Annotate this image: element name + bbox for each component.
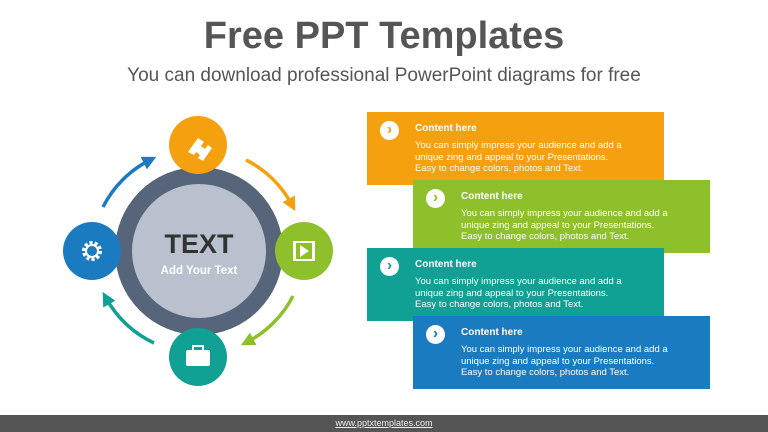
panel: blue: Content here [461, 327, 523, 338]
panel: green: You can simply impress your audience and add a [461, 208, 668, 219]
panel: orange: unique zing and appeal to your Presentations. [415, 152, 608, 162]
panel: teal: › [387, 257, 392, 274]
center circle: TEXT [164, 229, 234, 259]
footer: www.pptxtemplates.com [335, 418, 433, 428]
panel: teal: unique zing and appeal to your Presentations. [415, 288, 608, 298]
panel: green: Content here [461, 191, 523, 202]
panel: green: Easy to change colors, photos and Text. [461, 231, 629, 242]
icon: gear [63, 222, 121, 280]
panel: green: › [433, 189, 438, 206]
center circle [115, 167, 283, 335]
icon: briefcase [169, 328, 227, 386]
panel: teal: Easy to change colors, photos and Text. [415, 299, 583, 310]
panel: orange: Content here [415, 123, 477, 134]
panel: orange: You can simply impress your audience and add a [415, 140, 622, 151]
panel: teal [367, 248, 664, 321]
panel: green: unique zing and appeal to your Presentations. [461, 220, 654, 230]
footer [0, 415, 768, 432]
panel: teal: Content here [415, 259, 477, 270]
panel: blue: › [433, 325, 438, 342]
arrows [103, 160, 293, 343]
icon: puzzle [169, 116, 227, 174]
title: Free PPT Templates [204, 15, 564, 57]
panel: orange [367, 112, 664, 185]
subtitle: You can download professional PowerPoint diagrams for free [127, 65, 641, 86]
panel: teal: You can simply impress your audience and add a [415, 276, 622, 287]
center circle: Add Your Text [161, 265, 238, 277]
panel: blue: Easy to change colors, photos and Text. [461, 367, 629, 378]
panel: blue: unique zing and appeal to your Presentations. [461, 356, 654, 366]
panel: orange: › [387, 121, 392, 138]
panel: blue [413, 316, 710, 389]
panel: blue: You can simply impress your audience and add a [461, 344, 668, 355]
panel: green [413, 180, 710, 253]
panel: orange: Easy to change colors, photos and Text. [415, 163, 583, 174]
icon: video [275, 222, 333, 280]
